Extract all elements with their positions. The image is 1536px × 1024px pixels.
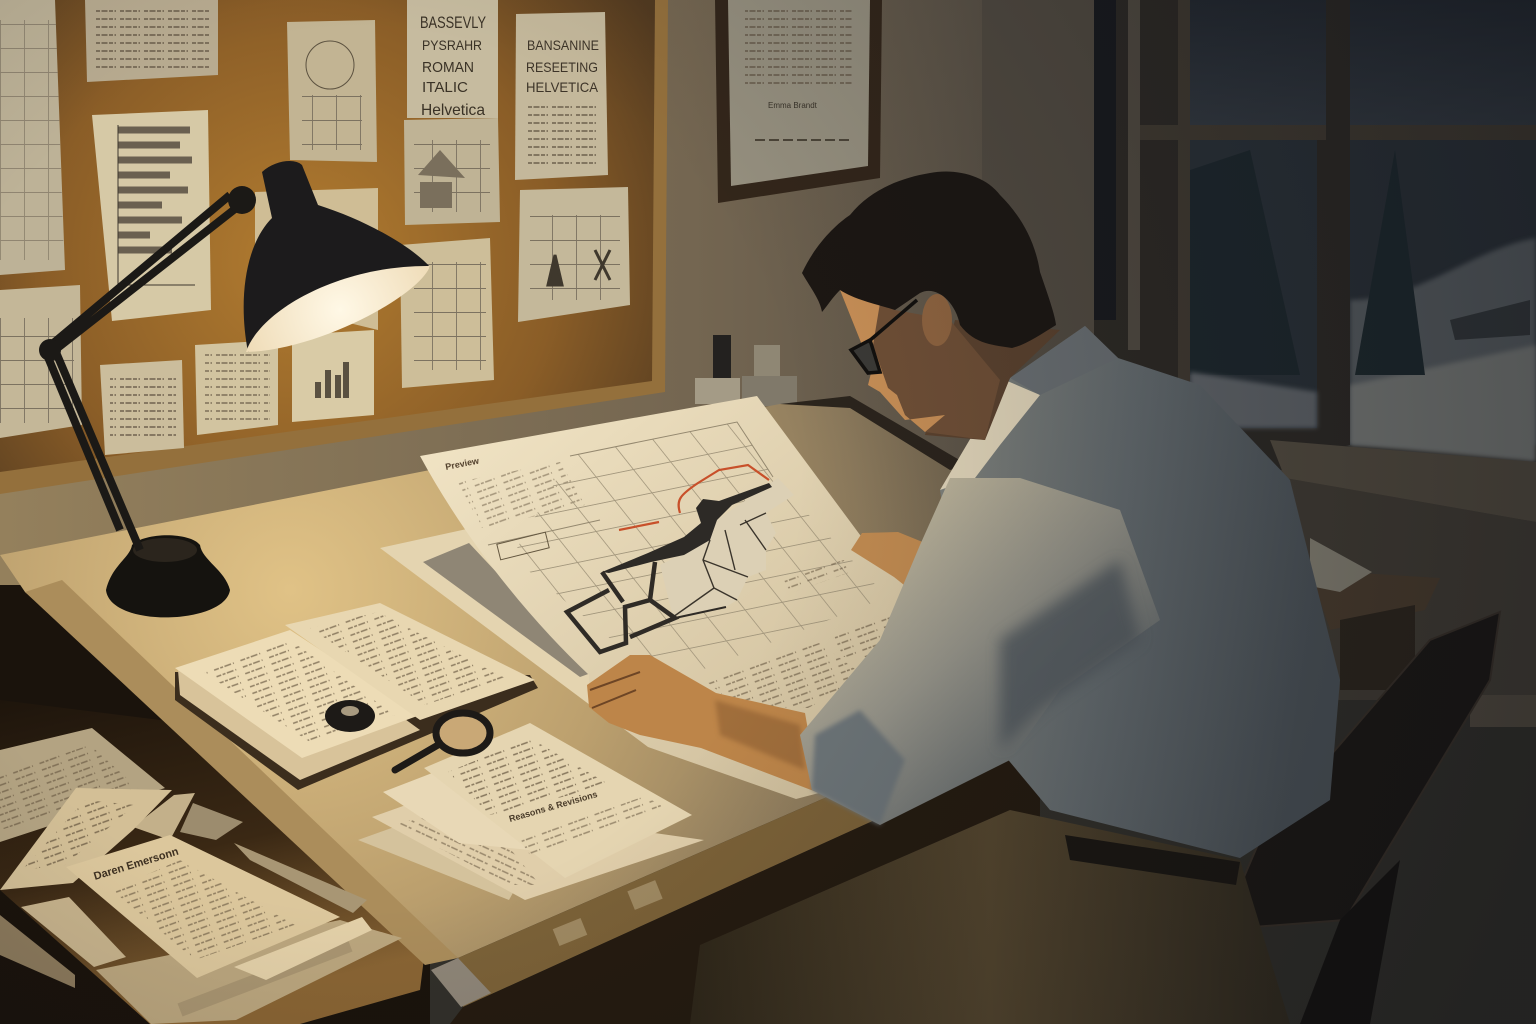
man: collar [1010,326,1118,395]
note: sheet behind lamp [255,188,378,330]
note: type heading sheet: RESEETING [526,59,598,75]
man: neck [925,320,1060,440]
wall pier beside window [982,0,1094,440]
sheet: page stack edge [0,915,75,988]
desk back shadow stripe [780,396,968,470]
desk front lip [458,704,1040,1007]
man: lit chest placket [940,380,1040,490]
note: font specimen: ROMAN [422,59,474,76]
lower right wall [1285,478,1536,700]
lamp: base [106,535,230,617]
window [1094,0,1536,470]
pane: top left [1190,0,1326,125]
lower right text [833,610,898,657]
man: ear [922,294,952,346]
man: lit cheek [840,290,945,432]
instruments on desk corner [695,335,797,406]
lamp: lit shade interior [246,266,430,352]
papers on left desk [0,728,402,1024]
sheet: top centre page [424,723,692,878]
note: chart far left [0,0,65,275]
man: shirt body [940,326,1340,858]
pane: bottom right with snowy hill [1350,140,1536,462]
left lower desk [0,700,425,1024]
man: belt [1065,835,1240,885]
note: font specimen: PYSRAHR [422,37,482,53]
man: sleeve blue fold [812,710,905,825]
sheet: scrap [133,793,195,840]
note: radial diagram [287,20,377,162]
map sheet under page [380,527,600,705]
man: face [840,290,1000,440]
sheet: under stack [21,897,126,967]
legend box [497,532,549,560]
dark route band [602,483,772,573]
note: dark glyph grid [518,187,630,322]
cell map [660,478,794,617]
note: shapes grid [404,118,500,225]
note: bar chart [92,110,211,321]
man: trousers [690,810,1290,1024]
red survey line [619,465,769,530]
map side text [782,560,848,593]
sheet: rear corner [180,803,243,840]
note: font specimen: ITALIC [422,79,468,96]
sheet: lower [96,920,402,1024]
man: forearm and near hand [587,655,819,793]
note: type heading sheet: HELVETICA [526,79,599,95]
left cabinet shadow [0,585,430,1024]
man: glasses [851,300,917,373]
note: font specimen: BASSEVLY [420,13,486,32]
framed certificate [715,0,882,203]
note: text memo [195,340,278,435]
desk drawers [450,745,1040,1024]
book: left page [175,630,420,758]
man: chair [1232,612,1500,1024]
drawing table top [0,400,1040,958]
map intro text [458,462,585,528]
note: font specimen: Helvetica [421,102,485,119]
chart grid [512,422,887,673]
desk left bevel [25,580,458,965]
note: list memo [100,360,184,455]
sheet: top centre page: Reasons & Revisions [508,789,599,824]
note: small bar chart [292,330,374,422]
sheet: main letter [66,835,340,978]
side table with papers [1310,538,1440,690]
large map sheet [420,396,916,799]
sheet: rear left [0,728,165,842]
magnifying glass [395,713,490,770]
territory outline [567,562,675,652]
note: type heading sheet: BANSANINE [527,37,599,53]
man: hair [802,171,1056,348]
papers in centre of desk [358,723,704,900]
sheet: main letter: Daren Emersonn [92,846,180,883]
corkboard [0,0,668,494]
note: type heading sheet [515,12,608,180]
lamp: arms [45,195,240,550]
sheet body [420,396,916,799]
pane: bottom left with pines [1190,140,1317,428]
open book [175,603,538,790]
loupe on book [325,700,375,732]
lower text [705,643,866,708]
man: far hand [851,532,925,597]
window sill [1270,440,1536,522]
drawer pulls [553,880,663,946]
note: left glyph grid [0,285,82,438]
framed certificate: Emma Brandt [768,101,818,110]
lamp [39,161,430,617]
note: number table [85,0,218,82]
man: sleeve shadow fold [1000,560,1140,750]
desk corner bracket [431,958,491,1007]
book: right page [285,603,535,720]
note: font specimen [407,0,498,119]
note: dotted grid [400,238,494,388]
pane: top right [1350,0,1536,125]
man: sleeve [800,478,1160,825]
sheet: upper left [0,788,172,890]
heading: Preview [444,455,481,472]
skirting board [1470,695,1536,727]
lamp: shade [244,161,430,352]
floor [430,700,1536,1024]
